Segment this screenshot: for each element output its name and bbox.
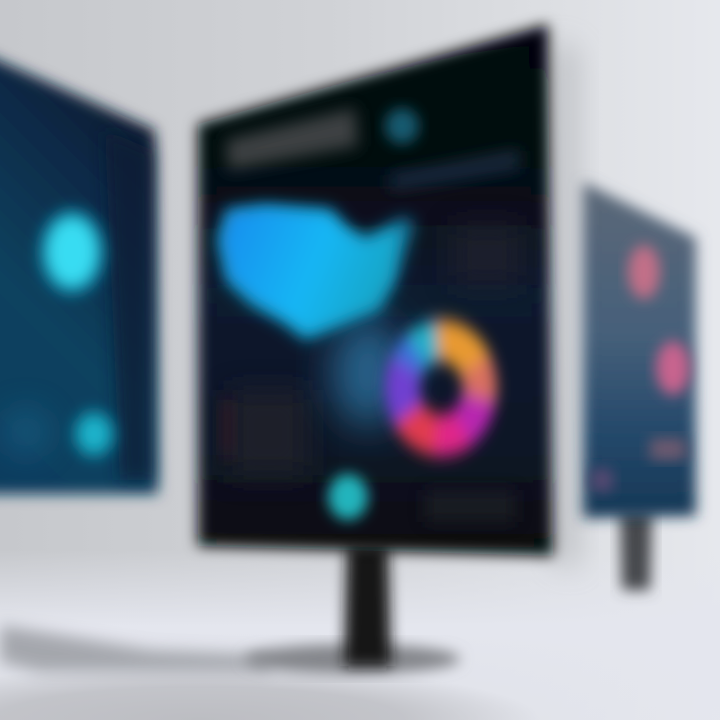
central blue glow — [332, 317, 404, 427]
right monitor pink blob middle — [656, 341, 690, 395]
left monitor screen — [0, 52, 158, 494]
floor shadow — [0, 625, 270, 672]
lower left block — [228, 390, 308, 475]
right monitor screen — [583, 182, 696, 518]
top teal icon — [385, 108, 419, 144]
floor lower shade — [0, 660, 560, 720]
left monitor — [0, 52, 158, 494]
right monitor mark — [650, 438, 686, 460]
top text lines — [390, 150, 520, 190]
right monitor pink blob top — [628, 245, 660, 299]
lower right block — [425, 490, 515, 522]
map body — [222, 208, 400, 334]
center monitor shadow strip — [552, 40, 578, 570]
right monitor — [583, 182, 696, 590]
left monitor faint blob — [0, 406, 52, 458]
right column block — [452, 225, 522, 285]
center monitor — [198, 24, 553, 674]
center monitor stand — [344, 545, 391, 666]
center monitor base — [244, 644, 460, 674]
left monitor right shade — [105, 130, 152, 480]
floor light band — [0, 550, 720, 720]
right monitor stand — [620, 510, 652, 590]
map shape — [216, 203, 414, 342]
bottom teal circle — [328, 474, 368, 520]
donut chart — [386, 321, 496, 455]
right monitor lower-left mark — [590, 467, 614, 493]
left monitor large cyan blob — [38, 208, 106, 296]
map halo — [216, 203, 414, 342]
heading block — [226, 108, 358, 170]
center monitor screen — [198, 24, 553, 556]
left monitor small cyan blob — [72, 409, 116, 459]
faint red mark — [222, 400, 232, 455]
